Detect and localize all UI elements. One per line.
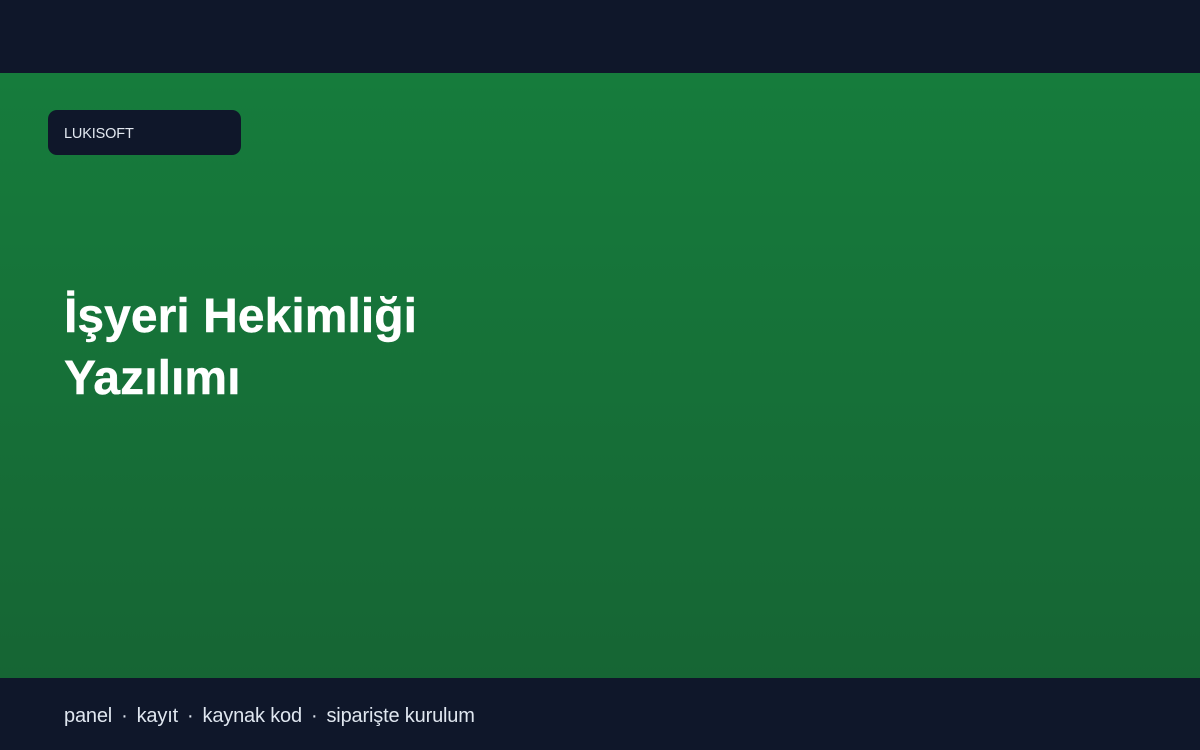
title: İşyeri Hekimliği [64,290,417,343]
brand badge [48,110,241,155]
title: Yazılımı [64,352,240,405]
feature list: panel · kayıt · kaynak kod · siparişte kurulum [64,705,475,727]
brand name: LUKISOFT [64,126,134,142]
top bar [0,0,1200,73]
bottom bar [0,678,1200,750]
title [64,290,417,405]
